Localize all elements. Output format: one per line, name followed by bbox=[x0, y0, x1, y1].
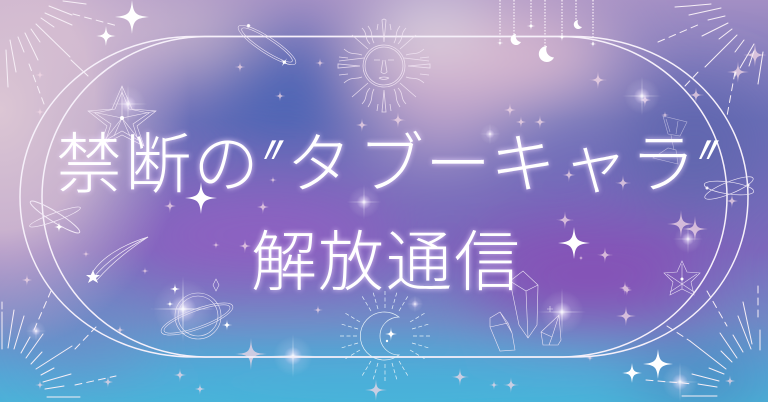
icon: sun with face bbox=[338, 19, 430, 112]
large four-point stars bbox=[96, 0, 673, 383]
radiating lines: bottom left bbox=[2, 291, 116, 397]
title line 1 bbox=[56, 124, 725, 210]
title line 1: ″ bbox=[679, 124, 725, 210]
radiating lines: top right bbox=[658, 4, 763, 116]
hanging moons and stars bbox=[496, 0, 596, 62]
icon: crystal star left bbox=[88, 86, 156, 146]
icon: crystal star right bbox=[664, 261, 700, 295]
icon: goblet bbox=[653, 116, 687, 164]
radiating lines: top left bbox=[6, 1, 118, 104]
icon: shooting star bbox=[86, 237, 148, 283]
title line 1: ″ bbox=[244, 124, 290, 210]
lens flares bbox=[25, 76, 703, 402]
title line 2: 解放通信 bbox=[251, 225, 520, 299]
title glow: 禁断の bbox=[56, 127, 259, 201]
double rounded frame bbox=[20, 36, 748, 357]
icon: ringed planet bbox=[158, 279, 236, 341]
title line 1: 禁断の bbox=[56, 127, 259, 201]
radiating lines: bottom right bbox=[646, 286, 760, 396]
title glow bbox=[56, 127, 696, 299]
icon: crossed orbits left bbox=[28, 197, 82, 237]
icon: crystals bbox=[490, 271, 561, 351]
title line 1: タブーキャラ bbox=[286, 127, 696, 201]
icon: crescent moon sunburst bbox=[339, 290, 431, 382]
icon: orbit ring top bbox=[233, 20, 300, 72]
title glow: 解放通信 bbox=[251, 225, 520, 299]
icon: crossed orbits right bbox=[703, 173, 755, 203]
title glow: タブーキャラ bbox=[286, 127, 696, 201]
